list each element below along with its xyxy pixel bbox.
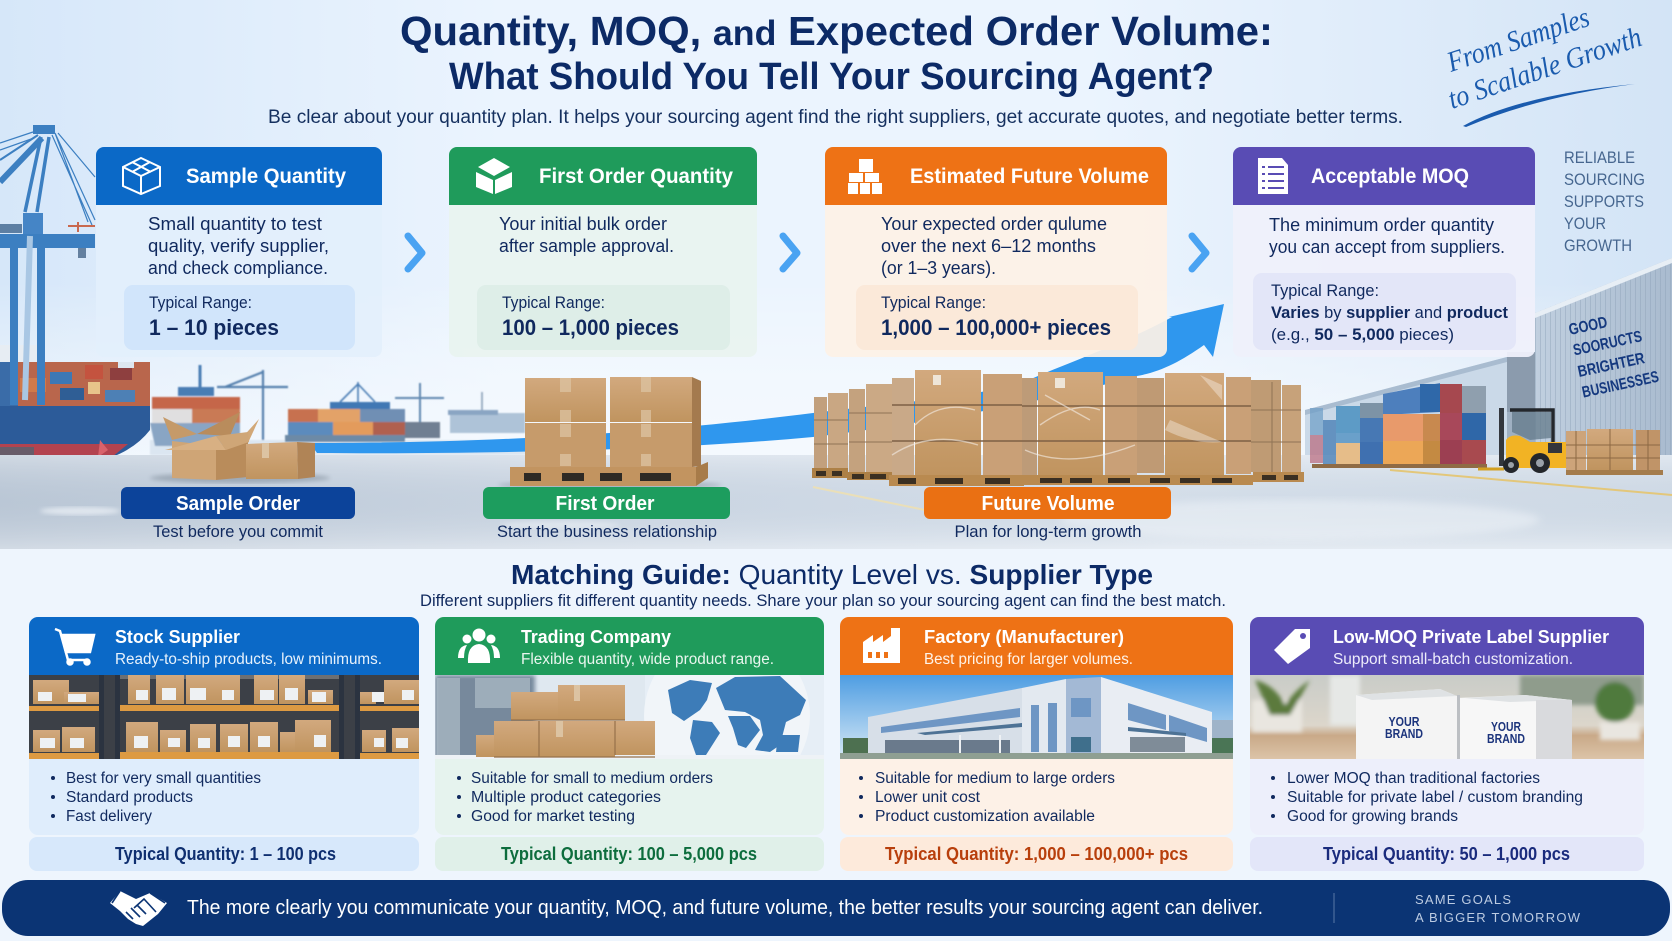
wall slogan: BRIGHTER — [1576, 350, 1647, 381]
bullet list: Fast delivery — [66, 808, 152, 825]
pill: future volume: Future Volume — [982, 493, 1114, 515]
photo: branded boxes: YOUR — [1388, 715, 1420, 729]
arrow: sample to first — [408, 236, 422, 269]
photo: boxes and globe — [435, 675, 810, 758]
bullet list: Good for market testing — [471, 808, 635, 825]
title: Quantity, MOQ, and Expected Order Volume: — [400, 8, 1273, 54]
hero scene: port to warehouse photo band — [0, 0, 1672, 549]
typical range box: Typical Range: — [1271, 281, 1379, 300]
future volume pallet stacks — [812, 370, 1304, 486]
footer banner — [2, 880, 1670, 936]
bullet list: Standard products — [66, 789, 193, 806]
bullet list: Lower unit cost — [875, 789, 981, 806]
stack c — [889, 370, 1024, 486]
banner slogan: SAME GOALS — [1415, 892, 1511, 907]
photo: warehouse shelves — [29, 675, 419, 759]
container ship — [0, 345, 150, 458]
banner slogan: A BIGGER TOMORROW — [1415, 910, 1581, 925]
floor — [0, 455, 1672, 549]
header: estimated future volume — [825, 147, 1167, 205]
header: sample quantity: Sample Quantity — [186, 165, 346, 188]
bullet list — [1271, 770, 1583, 825]
typical quantity bar — [435, 837, 824, 871]
side note: reliable sourcing — [1564, 148, 1645, 255]
header — [1250, 617, 1644, 675]
pill: first order: First Order — [556, 493, 655, 515]
pill: future volume — [924, 487, 1171, 519]
gantry crane — [0, 125, 95, 405]
typical quantity bar: Typical Quantity: 1 – 100 pcs — [115, 844, 336, 864]
first order pallet — [498, 377, 722, 489]
panel: factory manufacturer — [840, 617, 1233, 871]
stack f — [1251, 380, 1304, 482]
bullet list — [859, 770, 1115, 825]
side note: reliable sourcing: YOUR — [1564, 214, 1606, 233]
bullet list — [457, 770, 713, 825]
bullet list: Suitable for small to medium orders — [471, 770, 713, 787]
bullet list — [51, 770, 261, 825]
growth arrow ribbon — [310, 304, 1224, 453]
icon: factory — [863, 628, 900, 663]
subheading: matching guide: Different suppliers fit different quantity needs. Share your plan so your sourcing agent can find the best match. — [420, 592, 1226, 610]
description: and check compliance. — [148, 258, 328, 278]
description: Your initial bulk order — [499, 214, 667, 234]
side note: reliable sourcing: RELIABLE — [1564, 148, 1635, 167]
typical quantity bar — [29, 837, 419, 871]
icon: box outline — [123, 158, 160, 194]
panel: trading company — [435, 617, 824, 871]
description: quality, verify supplier, — [148, 236, 329, 256]
panel: low-moq private label supplier — [1250, 617, 1644, 871]
bullet list: Product customization available — [875, 808, 1095, 825]
header: Support small-batch customization. — [1333, 651, 1573, 668]
icon: solid box — [476, 158, 512, 194]
header: first order quantity — [449, 147, 757, 205]
bullet list: Good for growing brands — [1287, 808, 1458, 825]
stack e — [1137, 373, 1253, 485]
bullet list: Lower MOQ than traditional factories — [1287, 770, 1540, 787]
header — [840, 617, 1233, 675]
side note: reliable sourcing: SOURCING — [1564, 170, 1645, 189]
typical range box: Typical Range: — [881, 293, 986, 312]
caption: future volume: Plan for long-term growth — [954, 522, 1142, 541]
bullet list: Multiple product categories — [471, 789, 661, 806]
panel: estimated future volume — [825, 147, 1167, 357]
photo: factory building — [840, 675, 1233, 759]
stack d — [1022, 372, 1139, 485]
banner slogan — [1415, 892, 1581, 925]
wall slogan: GOOD — [1567, 314, 1609, 339]
subtitle: Be clear about your quantity plan. It helps your sourcing agent find the right suppliers, get accurate quotes, and negotiate better terms. — [268, 107, 1403, 128]
panel: acceptable moq — [1233, 147, 1535, 357]
warehouse building — [1305, 258, 1672, 475]
caption: first order: Start the business relationship — [497, 522, 717, 541]
arrow: first to future — [783, 236, 797, 269]
caption: sample order: Test before you commit — [153, 522, 323, 541]
typical quantity bar — [1250, 837, 1644, 871]
description: you can accept from suppliers. — [1269, 237, 1505, 257]
bullet list: Best for very small quantities — [66, 770, 261, 787]
side note: reliable sourcing: GROWTH — [1564, 236, 1632, 255]
description: over the next 6–12 months — [881, 236, 1096, 256]
typical range box: (e.g., 50 – 5,000 pieces) — [1271, 325, 1454, 344]
typical range box: 1 – 10 pieces — [149, 315, 279, 340]
handwritten tagline: to Scalable Growth — [1444, 21, 1646, 116]
header: first order quantity: First Order Quantity — [539, 165, 733, 188]
header — [29, 617, 419, 675]
description: after sample approval. — [499, 236, 674, 256]
header: Flexible quantity, wide product range. — [521, 651, 774, 668]
typical range box: 1,000 – 100,000+ pieces — [881, 315, 1111, 340]
icon: people — [458, 628, 500, 663]
side note: reliable sourcing: SUPPORTS — [1564, 192, 1644, 211]
typical range box: 100 – 1,000 pieces — [502, 315, 679, 340]
panel: first order quantity — [449, 147, 757, 357]
arrow: future to moq — [1192, 236, 1206, 269]
stack b — [847, 384, 892, 480]
panel: sample quantity — [96, 147, 382, 357]
description: Small quantity to test — [148, 214, 322, 234]
icon: shopping cart — [55, 629, 94, 664]
photo: branded boxes: BRAND — [1487, 732, 1525, 746]
description — [499, 214, 674, 256]
header: acceptable moq: Acceptable MOQ — [1311, 165, 1469, 188]
typical range box — [1253, 273, 1516, 350]
stack a — [812, 393, 848, 478]
description: (or 1–3 years). — [881, 258, 996, 278]
header: Trading Company — [521, 626, 672, 647]
icon: document list — [1258, 158, 1288, 194]
typical quantity bar — [840, 837, 1233, 871]
distant port skyline — [150, 365, 550, 455]
wall slogan — [1569, 317, 1659, 398]
bullet list: Suitable for private label / custom branding — [1287, 789, 1583, 806]
pill: sample order: Sample Order — [176, 493, 300, 515]
photo: branded boxes — [1250, 675, 1644, 759]
typical range box — [856, 285, 1138, 350]
panel: stock supplier — [29, 617, 419, 871]
typical range box: Varies by supplier and product — [1271, 303, 1508, 322]
header: estimated future volume: Estimated Future Volume — [910, 165, 1149, 188]
title — [400, 8, 1273, 98]
pill: sample order — [121, 487, 355, 519]
typical quantity bar: Typical Quantity: 1,000 – 100,000+ pcs — [885, 844, 1188, 864]
heading: matching guide: Matching Guide: Quantity Level vs. Supplier Type — [511, 559, 1153, 590]
typical quantity bar: Typical Quantity: 50 – 1,000 pcs — [1323, 844, 1570, 864]
header — [435, 617, 824, 675]
right pallet boxes — [1566, 429, 1663, 475]
header: Ready-to-ship products, low minimums. — [115, 651, 382, 668]
header: acceptable moq — [1233, 147, 1535, 205]
description — [148, 214, 329, 278]
header: Stock Supplier — [115, 626, 240, 647]
typical range box: Typical Range: — [502, 293, 605, 312]
bullet list: Suitable for medium to large orders — [875, 770, 1115, 787]
icon: stacked boxes — [848, 159, 882, 194]
header: Low-MOQ Private Label Supplier — [1333, 626, 1609, 647]
forklift — [1478, 408, 1566, 473]
description: Your expected order qulume — [881, 214, 1107, 234]
header: Best pricing for larger volumes. — [924, 651, 1133, 668]
description: The minimum order quantity — [1269, 215, 1494, 235]
container stacks — [1310, 383, 1487, 468]
description — [1269, 215, 1505, 257]
header: Factory (Manufacturer) — [924, 626, 1124, 647]
sky — [0, 0, 1672, 362]
divider — [1333, 893, 1335, 923]
photo: branded boxes: YOUR — [1491, 720, 1521, 734]
banner message: The more clearly you communicate your quantity, MOQ, and future volume, the better results your sourcing agent can deliver. — [187, 896, 1263, 919]
sample order open box — [150, 412, 330, 483]
icon: price tag — [1274, 629, 1310, 664]
typical quantity bar: Typical Quantity: 100 – 5,000 pcs — [501, 844, 757, 864]
typical range box: Typical Range: — [149, 293, 252, 312]
header: sample quantity — [96, 147, 382, 205]
icon: handshake — [110, 891, 167, 926]
photo: branded boxes: BRAND — [1385, 727, 1423, 741]
wall slogan: SOORUCTS — [1572, 328, 1644, 359]
typical range box — [477, 285, 730, 350]
typical range box — [124, 285, 355, 350]
description — [881, 214, 1107, 278]
title: What Should You Tell Your Sourcing Agent? — [449, 56, 1214, 98]
pill: first order — [483, 487, 730, 519]
